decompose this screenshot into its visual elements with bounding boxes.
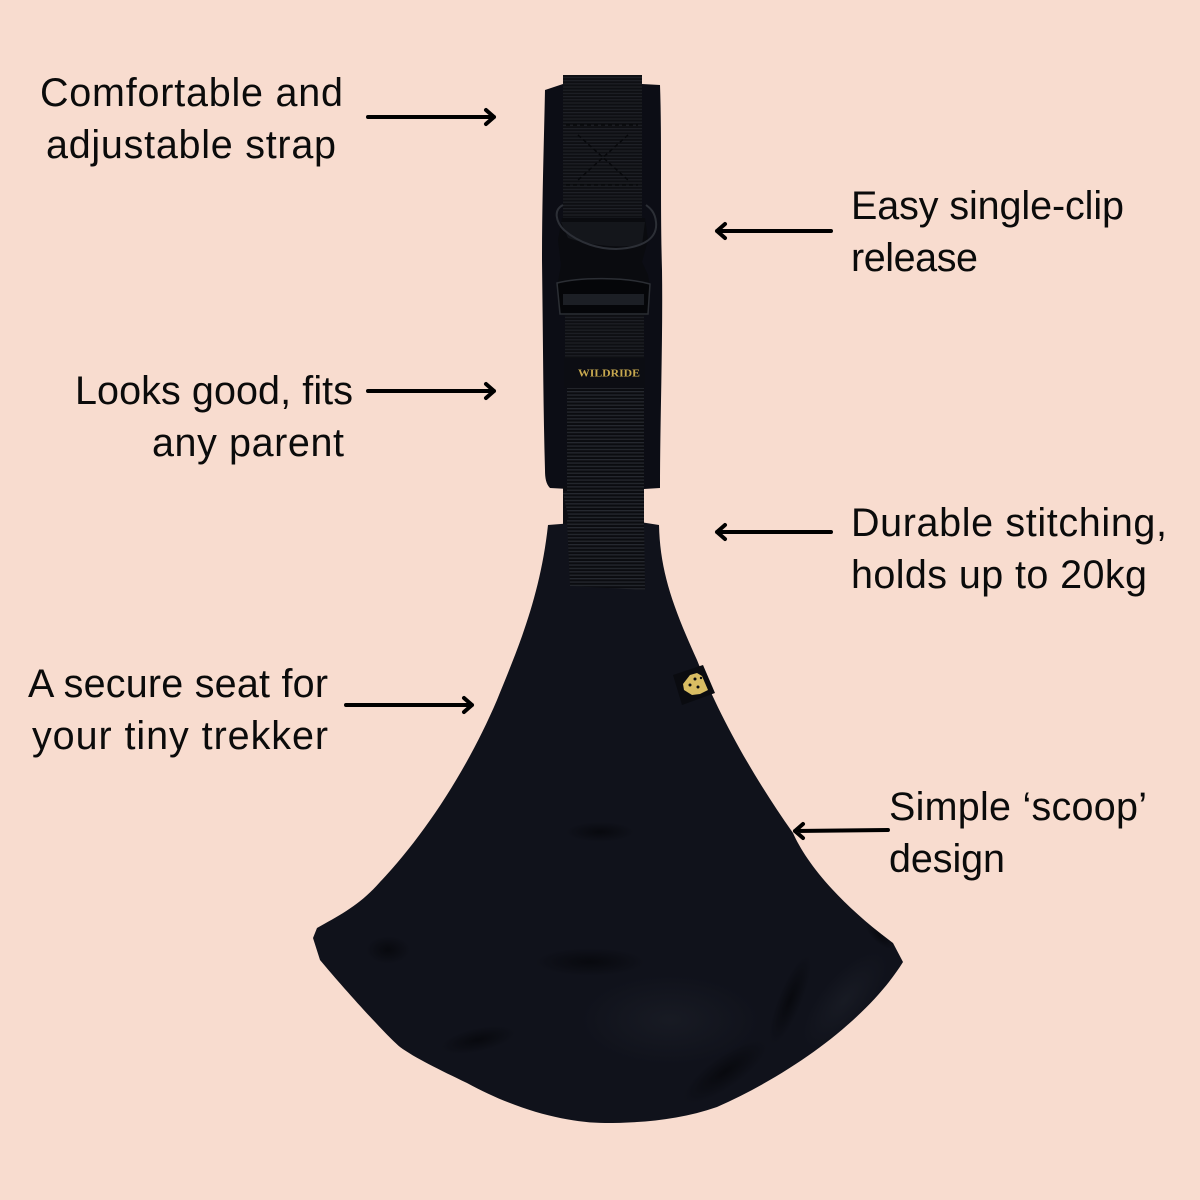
text: comfortable strap: Comfortable and bbox=[40, 71, 343, 115]
arrow: to buckle bbox=[717, 224, 831, 238]
arrow: to seat bbox=[346, 698, 472, 712]
text: secure seat bbox=[28, 662, 328, 758]
text: scoop design bbox=[889, 785, 1147, 881]
callout: durable stitching bbox=[717, 501, 1167, 597]
shoulder pad bbox=[542, 75, 662, 489]
arrow: to stitching bbox=[717, 525, 831, 539]
text: secure seat: A secure seat for bbox=[28, 662, 328, 706]
callout: single-clip release bbox=[717, 184, 1124, 280]
callout: secure seat bbox=[28, 662, 472, 758]
side-release buckle bbox=[557, 205, 656, 315]
strap neck bbox=[563, 486, 644, 528]
leopard tag bbox=[673, 665, 715, 705]
text: comfortable strap bbox=[40, 71, 343, 167]
arrow: to strap bbox=[368, 110, 494, 124]
arrow: to scoop bbox=[795, 824, 888, 838]
text: scoop design: design bbox=[889, 837, 1005, 881]
text: fits any parent bbox=[75, 369, 353, 465]
callout: fits any parent bbox=[75, 369, 494, 465]
callout: comfortable strap bbox=[40, 71, 494, 167]
text: scoop design: Simple ‘scoop’ bbox=[889, 785, 1147, 829]
woven brand label bbox=[564, 358, 645, 388]
callout: scoop design bbox=[795, 785, 1147, 881]
scoop seat body bbox=[313, 522, 903, 1123]
text: single-clip release: release bbox=[851, 236, 978, 280]
text: durable stitching: Durable stitching, bbox=[851, 501, 1167, 545]
text: secure seat: your tiny trekker bbox=[32, 714, 328, 758]
text: single-clip release: Easy single-clip bbox=[851, 184, 1124, 228]
text: fits any parent: Looks good, fits bbox=[75, 369, 353, 413]
woven brand label: WILDRIDE bbox=[578, 368, 640, 380]
text: fits any parent: any parent bbox=[152, 421, 344, 465]
text: durable stitching bbox=[851, 501, 1167, 597]
sling product illustration bbox=[313, 75, 903, 1123]
arrow: to pad bbox=[368, 384, 494, 398]
text: comfortable strap: adjustable strap bbox=[46, 123, 336, 167]
text: single-clip release bbox=[851, 184, 1124, 280]
webbing strap bbox=[563, 75, 645, 590]
text: durable stitching: holds up to 20kg bbox=[851, 553, 1147, 597]
